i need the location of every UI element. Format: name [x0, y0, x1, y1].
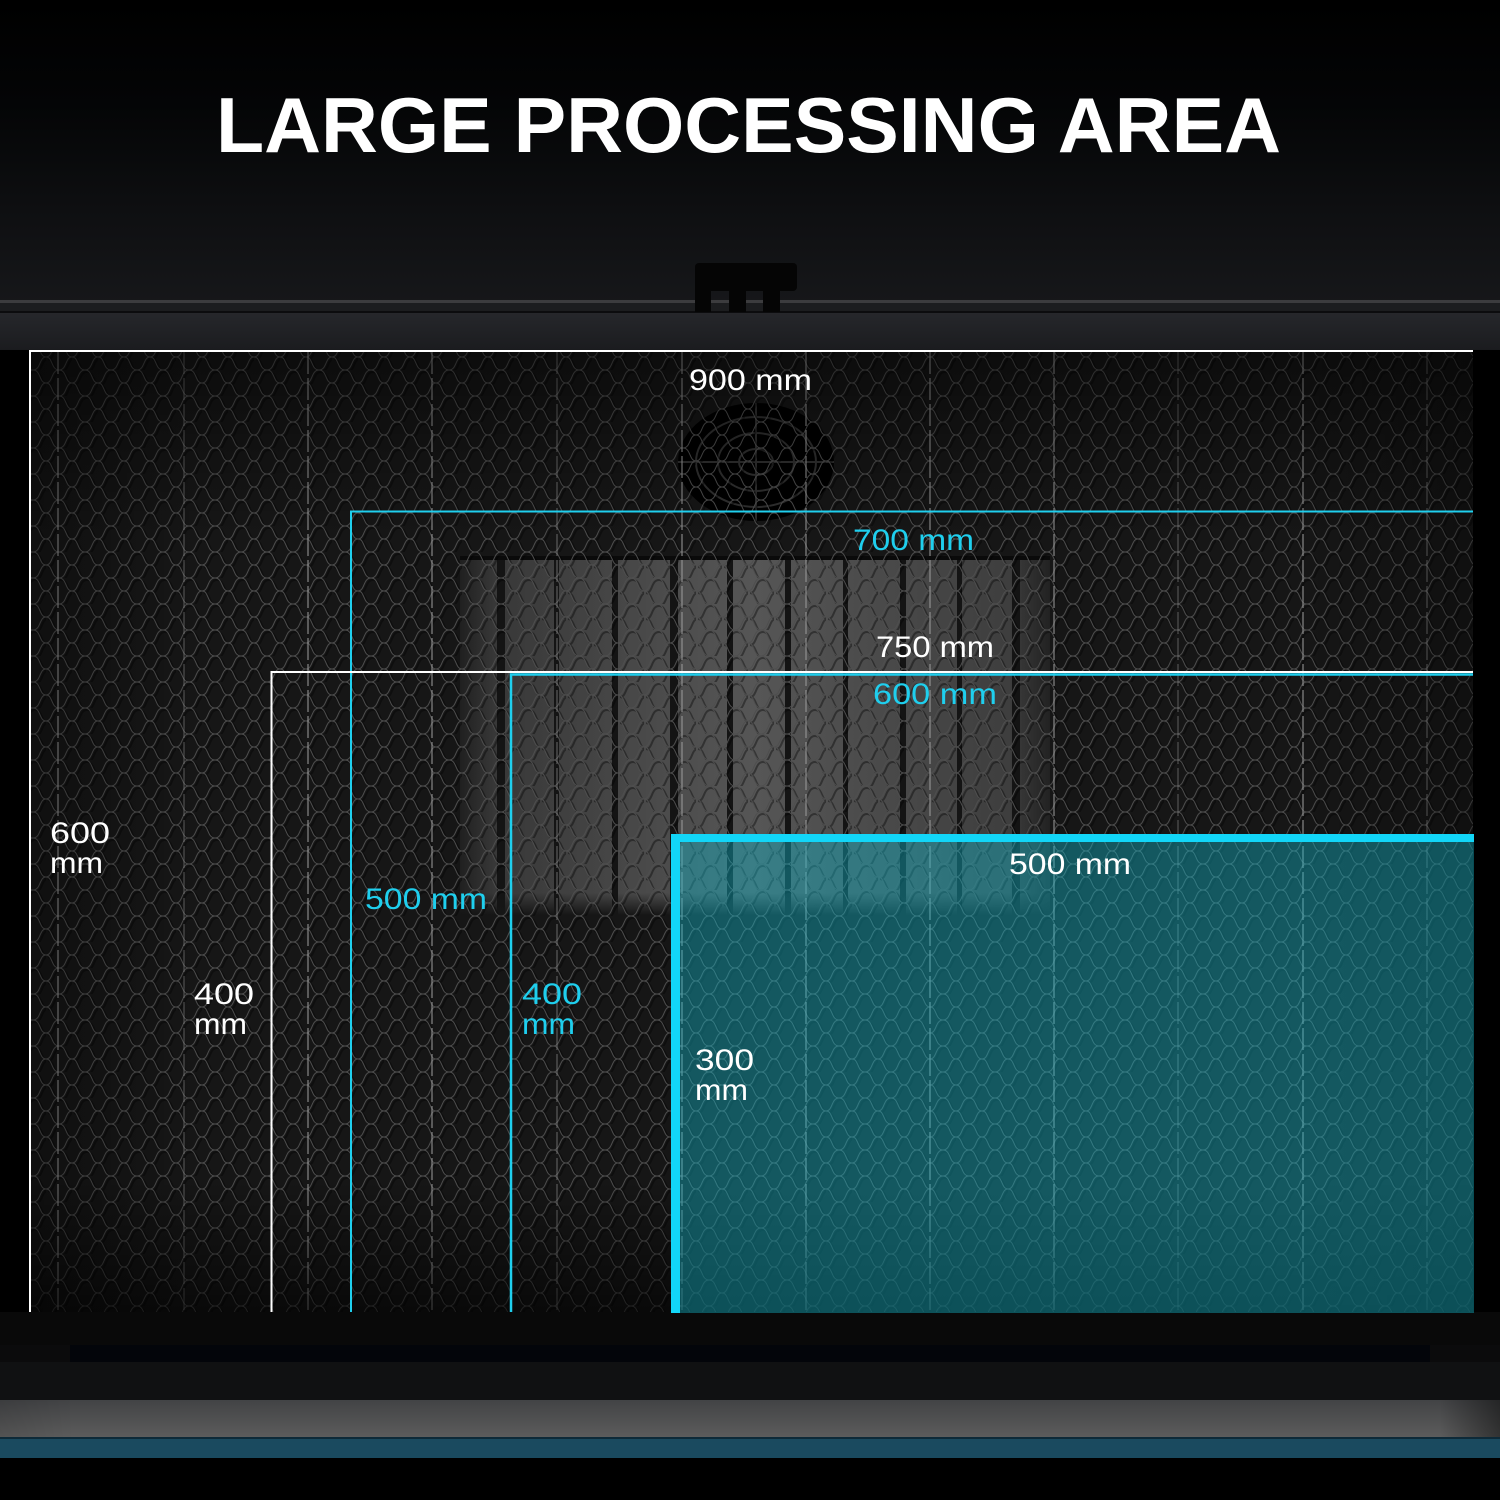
label: 600 mm: 600 mm: [873, 678, 997, 711]
front of machine: [0, 1312, 1500, 1500]
label: 700 mm: 700 mm: [853, 524, 974, 557]
lid hinge bracket: [695, 263, 797, 312]
back panel slats: [460, 556, 1050, 915]
bed shading: [30, 350, 1473, 1312]
label: 600 mm height: mm: [50, 847, 103, 880]
label: 500 mm width: 500 mm: [1009, 848, 1131, 881]
exhaust fan: [678, 403, 834, 521]
label: 300 mm height: [695, 1044, 754, 1107]
support rails: [58, 352, 1427, 1312]
label: 400 mm height cyan: mm: [522, 1008, 575, 1041]
area: 750 x 400 mm outline: [272, 672, 1473, 1312]
label: 300 mm height: mm: [695, 1074, 748, 1107]
area: 700 x 500 mm outline: [351, 512, 1473, 1312]
label: 400 mm height white: 400: [194, 978, 254, 1011]
area: 600 x 400 mm outline: [511, 674, 1473, 1312]
lid rail: [0, 300, 1500, 349]
machine lid background: [0, 0, 1500, 350]
honeycomb mesh: [30, 350, 1473, 1312]
label: 900 mm: 900 mm: [689, 364, 812, 397]
honeycomb work bed: [30, 350, 1473, 1312]
label: 400 mm height cyan: 400: [522, 978, 582, 1011]
label: 500 mm height: 500 mm: [365, 883, 487, 916]
label: 300 mm height: 300: [695, 1044, 754, 1077]
title: LARGE PROCESSING AREA: [216, 81, 1281, 169]
label: 600 mm height: 600: [50, 817, 110, 850]
label: 400 mm height cyan: [522, 978, 582, 1041]
label: 600 mm height: [50, 817, 110, 880]
label: 400 mm height white: mm: [194, 1008, 247, 1041]
label: 750 mm: 750 mm: [876, 631, 994, 664]
label: 400 mm height white: [194, 978, 254, 1041]
area: 900 x 600 mm outline: [30, 351, 1473, 1312]
area: 500 x 300 mm highlighted: [671, 834, 1474, 1313]
